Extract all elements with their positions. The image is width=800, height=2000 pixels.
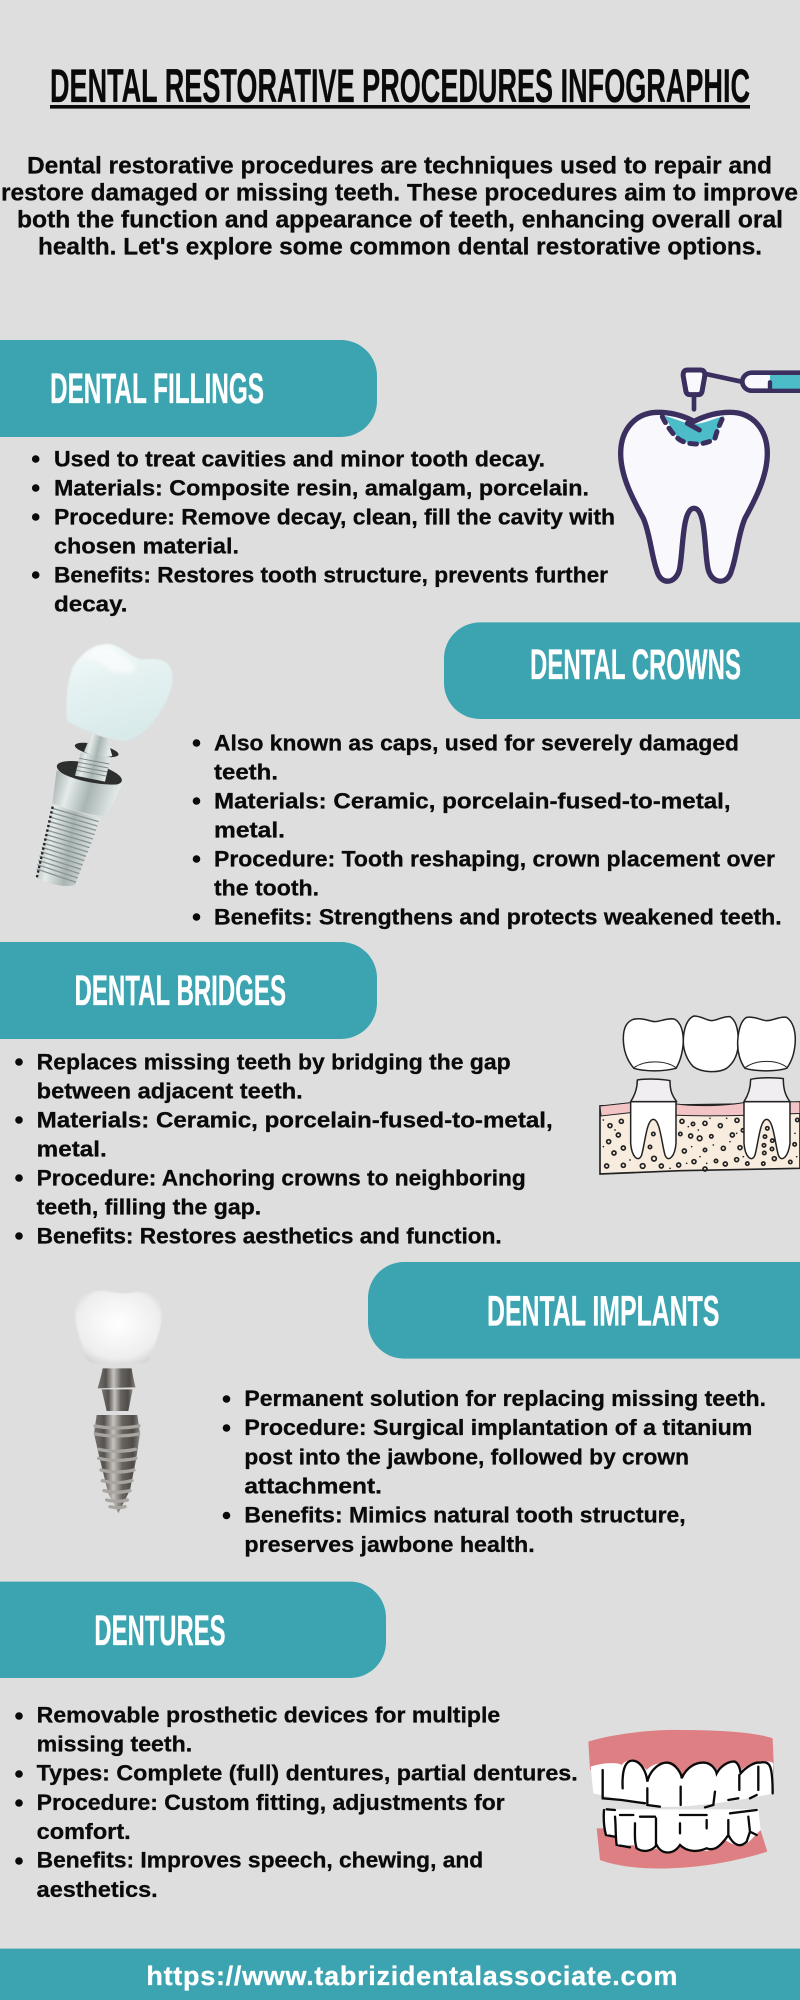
icon: dentures <box>588 1730 774 1868</box>
bullet list: bridges: Benefits: Restores aesthetics and function. <box>37 1223 502 1248</box>
heading pill: dentures <box>0 1582 386 1678</box>
bullet list: crowns: Materials: Ceramic, porcelain-fused-to-metal, <box>214 789 731 814</box>
intro text: Dental restorative procedures are techniques used to repair and <box>27 152 772 180</box>
panel: dental fillings <box>0 340 800 616</box>
panel: dental implants <box>75 1262 800 1557</box>
panel: dental crowns <box>37 622 800 930</box>
bullet list: dentures: Types: Complete (full) dentures, partial dentures. <box>37 1761 578 1786</box>
bullet list: bridges: Materials: Ceramic, porcelain-fused-to-metal, <box>37 1107 553 1132</box>
heading: dentures: DENTURES <box>94 1607 226 1655</box>
bullet list: dentures: Removable prosthetic devices for multiple <box>37 1703 500 1728</box>
bullet list: implants: Procedure: Surgical implantation of a titanium <box>244 1415 752 1440</box>
bullet list: crowns: Also known as caps, used for severely damaged <box>214 731 739 756</box>
bullet list: implants: attachment. <box>244 1474 382 1498</box>
footer bar <box>0 1949 800 2000</box>
bullet list: fillings: Used to treat cavities and minor tooth decay. <box>54 446 545 472</box>
bullet list: bridges: metal. <box>37 1136 107 1161</box>
bullet list: fillings: chosen material. <box>54 534 239 558</box>
bullet list: dentures: Benefits: Improves speech, chewing, and <box>37 1848 483 1873</box>
bullet list: fillings: Procedure: Remove decay, clean, fill the cavity with <box>54 504 615 530</box>
bullet list: dentures: Procedure: Custom fitting, adjustments for <box>37 1790 505 1815</box>
bullet list: dentures: aesthetics. <box>37 1877 158 1902</box>
panel: dental bridges <box>0 942 800 1248</box>
intro text <box>1 152 798 260</box>
bullet list: implants: post into the jawbone, followed by crown <box>244 1444 689 1469</box>
icon: dental bridge diagram <box>600 1016 800 1174</box>
bullet list: fillings <box>32 446 615 616</box>
bullet list: dentures: comfort. <box>37 1819 131 1844</box>
bullet list: crowns: teeth. <box>214 760 278 785</box>
bullet list: bridges <box>15 1049 553 1248</box>
bullet list: bridges: Replaces missing teeth by bridging the gap <box>37 1049 511 1074</box>
bullet list: crowns: Procedure: Tooth reshaping, crown placement over <box>214 846 775 872</box>
bullet list: crowns: the tooth. <box>214 876 319 900</box>
intro text: health. Let's explore some common dental restorative options. <box>38 233 762 260</box>
icon: vertical dental implant <box>75 1291 162 1513</box>
bullet list: bridges: between adjacent teeth. <box>37 1078 303 1103</box>
bullet list: implants <box>223 1386 766 1557</box>
heading: dental bridges: DENTAL BRIDGES <box>74 967 286 1015</box>
bullet list: crowns: metal. <box>214 818 285 843</box>
icon: tooth with filling and drill <box>621 370 800 581</box>
bullet list: bridges: teeth, filling the gap. <box>37 1194 261 1219</box>
bullet list: fillings: Materials: Composite resin, amalgam, porcelain. <box>54 476 589 500</box>
bullet list: crowns: Benefits: Strengthens and protects weakened teeth. <box>214 904 782 930</box>
bullet list: dentures <box>15 1703 578 1902</box>
heading: dental fillings: DENTAL FILLINGS <box>50 365 264 413</box>
heading pill: dental crowns <box>444 622 800 719</box>
heading pill: dental implants <box>368 1262 800 1359</box>
intro text: restore damaged or missing teeth. These procedures aim to improve <box>1 179 798 206</box>
bullet list: fillings: Benefits: Restores tooth structure, prevents further <box>54 562 608 587</box>
bullet list: implants: Permanent solution for replacing missing teeth. <box>244 1386 766 1411</box>
icon: angled crown implant <box>37 644 173 886</box>
panel: dentures <box>0 1582 774 1902</box>
bullet list: implants: preserves jawbone health. <box>244 1532 535 1557</box>
bullet list: fillings: decay. <box>54 591 128 616</box>
bullet list: bridges: Procedure: Anchoring crowns to neighboring <box>37 1165 526 1190</box>
bullet list: implants: Benefits: Mimics natural tooth structure, <box>244 1503 686 1528</box>
intro text: both the function and appearance of teeth, enhancing overall oral <box>17 206 783 233</box>
bullet list: crowns <box>193 731 782 930</box>
bullet list: dentures: missing teeth. <box>37 1731 192 1756</box>
heading pill: dental bridges <box>0 942 377 1039</box>
footer url: https://www.tabrizidentalassociate.com <box>146 1961 677 1991</box>
heading pill: dental fillings <box>0 340 377 437</box>
